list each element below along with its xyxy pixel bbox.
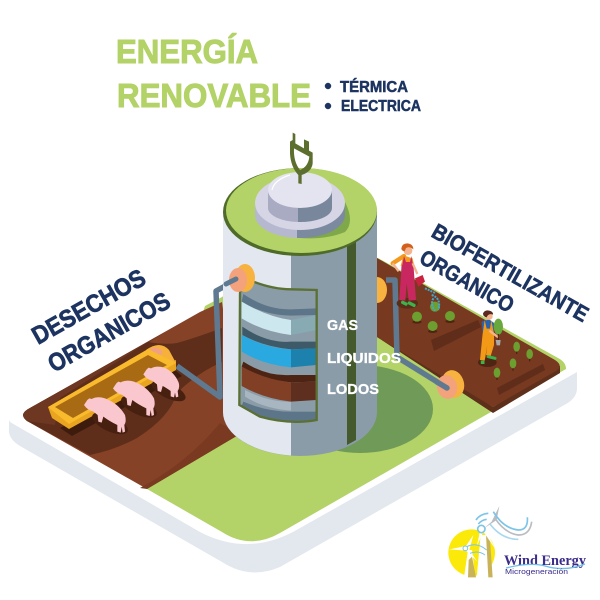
layer labels: LIQUIDOS	[327, 350, 401, 367]
list: energy types: ELECTRICA	[341, 98, 421, 115]
right outlet disc	[434, 368, 467, 401]
panel: biofertilizer field	[377, 258, 560, 413]
farmer with tree	[478, 310, 503, 367]
icon: plug	[290, 133, 313, 184]
window with layers	[239, 282, 317, 422]
platform base	[9, 372, 577, 572]
pig 2	[113, 381, 160, 422]
plants: round bushes	[412, 302, 455, 333]
layer labels: LODOS	[327, 381, 379, 398]
tank roof	[223, 168, 377, 256]
heading: biofertilizer: ORGANICO	[416, 245, 518, 318]
pig 3	[143, 367, 188, 405]
plants: saplings	[494, 342, 533, 380]
layer labels: GAS	[327, 317, 358, 334]
rear inlet disc	[367, 277, 387, 303]
pig 1	[84, 397, 131, 439]
title: ENERGÍA	[116, 33, 258, 71]
tank shadow on ground	[287, 365, 433, 453]
list: energy types: TÉRMICA	[340, 79, 408, 96]
layer: sludge	[242, 362, 316, 421]
left pipe	[177, 279, 238, 397]
list: energy types	[325, 79, 421, 115]
layer labels	[327, 317, 401, 398]
logo: Wind Energy: Microgeneración	[505, 567, 568, 576]
layer: liquids	[242, 335, 316, 367]
title: RENOVABLE	[117, 78, 311, 115]
panel: organic waste field	[23, 302, 240, 489]
logo: Wind Energy: Wind Energy	[504, 553, 587, 569]
roof cap	[255, 172, 345, 238]
layer: gas	[242, 302, 317, 349]
farmer with watering can	[393, 243, 439, 311]
right pipe	[386, 280, 447, 388]
left inlet disc	[226, 264, 255, 292]
heading: organic waste: ORGANICOS	[43, 287, 175, 378]
trough	[48, 345, 182, 436]
logo artwork	[448, 506, 532, 577]
title	[116, 33, 311, 115]
tank	[223, 212, 377, 456]
heading: organic waste: DESECHOS	[27, 264, 151, 350]
pigs	[84, 367, 188, 439]
logo: Wind Energy	[448, 506, 587, 577]
green ground	[147, 240, 566, 541]
